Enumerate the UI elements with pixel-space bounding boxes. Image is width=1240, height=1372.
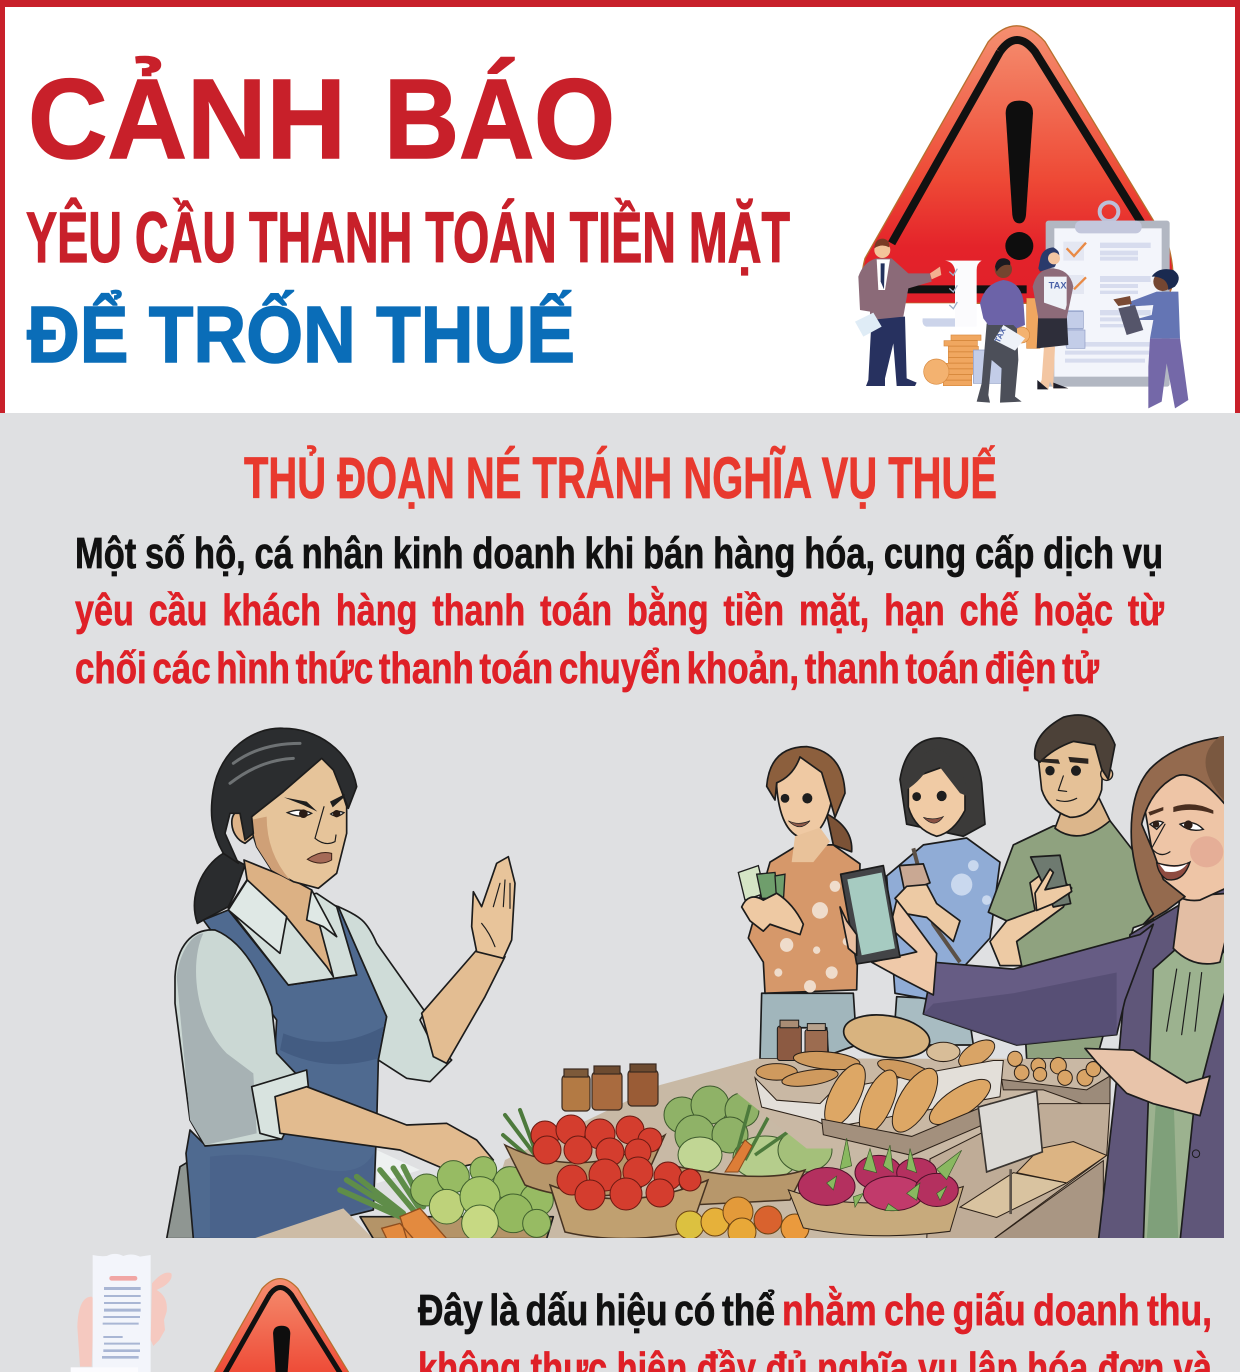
cabbage basket <box>670 1165 805 1205</box>
customer 2 phone <box>899 864 930 893</box>
person: woman with tax folder: TAX <box>1049 280 1067 290</box>
wooden crate bread <box>927 1104 1110 1242</box>
customer 2 hands <box>895 885 960 942</box>
table edge <box>253 1208 373 1239</box>
left sleeve <box>175 930 307 1146</box>
basket back <box>505 1135 665 1196</box>
raised hand <box>472 857 515 958</box>
nose and mouth <box>315 807 336 844</box>
warning triangle <box>862 26 1173 303</box>
tablet <box>841 866 900 964</box>
hair <box>211 728 357 863</box>
bread and table items behind <box>720 1059 1113 1148</box>
bread tray <box>822 1104 990 1155</box>
customer 2 shirt <box>887 838 1000 1000</box>
dragon fruit <box>798 1155 958 1211</box>
basket <box>360 1217 553 1239</box>
customer 1 pants <box>760 993 857 1059</box>
small baguettes <box>756 1049 938 1089</box>
customer 3 phone <box>1031 855 1071 907</box>
shirt collar <box>228 879 357 985</box>
illustration: seller refusing payment <box>167 728 553 1242</box>
customer 1 blouse <box>748 845 860 993</box>
customer 2 hair back <box>900 738 985 836</box>
receipt <box>902 261 982 353</box>
woman's open hand <box>1085 1048 1210 1116</box>
ponytail <box>194 853 245 923</box>
title: warning: CẢNH <box>28 56 346 182</box>
front tomatoes <box>557 1157 701 1210</box>
dragon fruit basket <box>788 1186 963 1236</box>
produce: tomatoes, jars, vegetables <box>503 1064 832 1246</box>
customer 1 hair back <box>827 814 852 852</box>
jacket button <box>1192 1150 1200 1157</box>
person: man in suit <box>855 239 941 386</box>
customer 2 face <box>908 766 965 836</box>
subtitle: cash payment request: YÊU CẦU THANH TOÁN TIỀN MẶT <box>26 198 790 278</box>
table surface <box>480 1058 1110 1238</box>
icon: hand holding receipt <box>71 1254 172 1372</box>
right sleeve <box>338 907 452 1082</box>
white gap <box>377 1150 420 1183</box>
tablet fingers <box>840 907 857 955</box>
title: warning <box>28 56 615 182</box>
woman's wrist hand <box>872 900 937 995</box>
back tomatoes <box>531 1115 662 1166</box>
woman's tablet arm <box>923 924 1153 1045</box>
illustration: customers <box>720 715 1230 1242</box>
carrots <box>382 1208 447 1239</box>
greens sprig <box>503 1110 535 1160</box>
jars <box>777 1020 828 1061</box>
subtitle: tax evasion: ĐỂ TRỐN THUẾ <box>27 290 575 379</box>
peppers <box>676 1196 810 1238</box>
header red frame <box>0 0 1240 413</box>
customer 1 hands <box>742 893 803 935</box>
icon: warning triangle with tax people <box>855 26 1188 408</box>
woman's neck <box>1173 893 1230 964</box>
person: woman with tablet <box>1113 269 1188 408</box>
customer 3 head <box>1038 734 1103 817</box>
herb stalks <box>734 1104 788 1161</box>
illustration: market stall <box>167 715 1230 1246</box>
coins <box>924 298 1040 386</box>
brows and eyes <box>284 794 345 812</box>
big round loaf <box>841 1010 932 1063</box>
content background <box>0 413 1240 1372</box>
header background <box>0 0 1240 413</box>
customer 3 hair <box>1035 715 1115 779</box>
cabbage pile <box>664 1086 832 1180</box>
woman's face <box>1143 762 1230 900</box>
raised arm <box>422 950 505 1063</box>
crate front <box>990 1161 1103 1242</box>
apron <box>186 902 387 1239</box>
customer 3 shirt <box>988 821 1153 1059</box>
text block: warning sign explanation: Đây là dấu hiệu có thể <box>418 1286 775 1335</box>
text block: warning sign explanation <box>418 1285 1212 1372</box>
baguettes front <box>816 1057 997 1139</box>
clipboard <box>1046 202 1170 387</box>
woman's right jacket and top <box>1098 872 1230 1242</box>
person: man with tax paper <box>977 258 1025 403</box>
customer 1 head <box>777 757 832 838</box>
face <box>248 757 347 888</box>
customer 2 bag strap <box>913 848 960 962</box>
collar flaps <box>228 880 337 953</box>
customer 3 fingers <box>1035 869 1072 910</box>
customer 1 neck <box>792 828 830 862</box>
customer 3 neck <box>1055 793 1110 836</box>
woman's eyes and mouth <box>1150 821 1203 830</box>
ear <box>232 812 253 843</box>
dragon fruit scales <box>827 1138 962 1211</box>
sign <box>978 1091 1042 1214</box>
cash <box>738 866 785 902</box>
jars <box>562 1064 658 1111</box>
customer 1 hair <box>767 747 845 817</box>
roll tray <box>1002 1076 1110 1105</box>
lower forearm <box>275 1087 493 1170</box>
customer 2 fringe <box>903 748 968 797</box>
person: woman with tax folder <box>1033 247 1073 389</box>
customer 2 pants <box>893 997 973 1045</box>
lettuce <box>411 1157 553 1242</box>
woman's hair <box>1131 736 1230 924</box>
money <box>973 312 1085 383</box>
bread crate white <box>755 1061 1003 1128</box>
text block: description <box>75 529 1164 693</box>
front tomato basket <box>550 1180 708 1238</box>
person: man with tax paper: TAX <box>993 326 1008 344</box>
skirt <box>166 1162 192 1238</box>
customer 3 arm <box>990 869 1072 966</box>
neck <box>244 860 333 977</box>
icon: small warning triangle <box>183 1279 378 1372</box>
title: warning: BÁO <box>384 56 615 182</box>
green onions <box>340 1167 423 1217</box>
carrot <box>725 1140 752 1172</box>
roll cluster <box>927 1034 1101 1086</box>
